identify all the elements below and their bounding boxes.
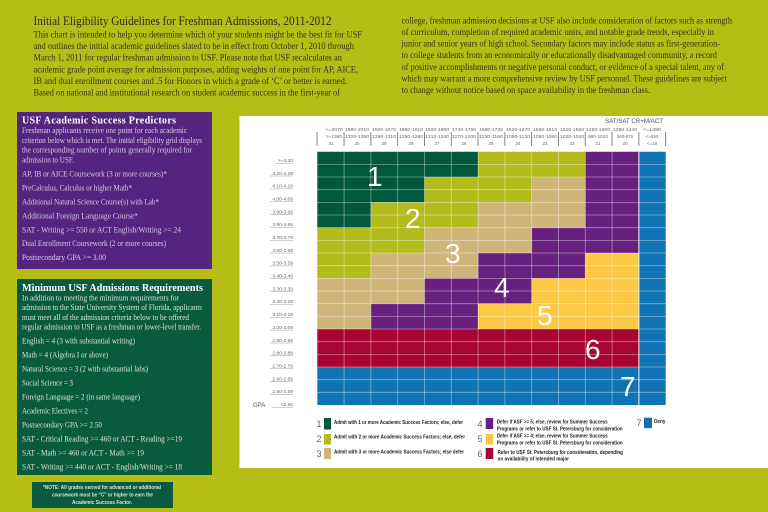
row labels: GPA ranges: 3.80-3.89 [272, 222, 293, 228]
row labels: GPA ranges: 2.50-2.59 [272, 389, 293, 395]
intro text: right column: which may warrant a more comprehensive review by USF personnel. These guidelines are subject [402, 74, 727, 84]
intro text: right column: junior and senior years of high school. Secondary factors may include status as first-generation- [401, 38, 720, 50]
legend item 4: Programs or refer to USF St. Petersburg for consideration [497, 426, 623, 432]
panel: Minimum USF Admissions Requirements [17, 279, 212, 475]
zone 6: red [317, 329, 639, 367]
legend item 7: Deny [654, 419, 666, 425]
row labels: GPA ranges: 3.00-3.09 [272, 325, 293, 331]
intro text: left column: IB and dual enrollment courses and .5 for Honors in which a grade of ‘C’ or better is earned. [34, 76, 347, 87]
panel: USF Academic Success Predictors: Additional Natural Science Course(s) with Lab* [22, 196, 159, 206]
intro text: left column [34, 13, 362, 98]
legend item 1: Admit with 1 or more Academic Success Factors; else, defer [334, 420, 464, 426]
legend [316, 418, 666, 462]
row labels: GPA ranges: 3.40-3.49 [272, 274, 293, 280]
column headers: test score ranges: 1130-1160 [479, 134, 504, 139]
column headers: test score ranges: 23 [542, 141, 548, 146]
column headers: test score ranges: 1860-1910 [399, 127, 424, 132]
intro text: right column: college, freshman admission decisions at USF also include consideration of factors such as strength [402, 16, 732, 26]
legend item 1 [316, 418, 464, 430]
zone 4: purple [371, 152, 639, 329]
panel: USF Academic Success Predictors: admission to USF. [22, 154, 74, 164]
legend item 3 [316, 448, 465, 459]
column headers: test score ranges: <=930 [646, 134, 658, 139]
column headers: test score ranges: 1560-1610 [533, 127, 558, 132]
intro text: left column: March 1, 2011 for regular freshman admission to USF. Please note that USF recalculates an [34, 52, 342, 64]
column headers: test score ranges: >=1360 [326, 134, 343, 139]
legend item 3: 3 [316, 449, 322, 459]
legend item 1: 1 [316, 419, 322, 429]
intro text: right column [401, 16, 732, 96]
legend item 6: Refer to USF St. Petersburg for consideration, depending [498, 450, 623, 456]
panel: Minimum USF Admissions Requirements: must meet all of the admission criteria below to be offered [22, 312, 190, 322]
note box: coursework must be “C” or higher to earn the [52, 492, 153, 498]
column headers: test score ranges: 20 [622, 141, 628, 146]
column headers: test score ranges: 1680-1730 [479, 127, 504, 132]
row labels: GPA ranges: 3.30-3.39 [272, 286, 293, 292]
row labels: GPA ranges: 3.90-3.99 [272, 209, 293, 215]
note box: *NOTE: All grades earned for advanced or additional [43, 485, 162, 491]
panel: Minimum USF Admissions Requirements: In addition to meeting the minimum requirements for [22, 292, 179, 302]
column headers: test score ranges: 1980-2010 [345, 127, 370, 132]
note box: Academic Success Factor. [72, 500, 132, 506]
row labels: GPA ranges: 4.00-4.09 [272, 196, 293, 202]
row labels: GPA ranges: 3.10-3.19 [272, 312, 293, 318]
row labels: GPA ranges: 4.20-4.29 [272, 171, 293, 177]
intro text: right column: to change without notice based on space availability in the freshman class. [402, 85, 650, 96]
legend item 4: 4 [477, 419, 483, 429]
intro text: left column: This chart is intended to help you determine which of your students might be the best fit for USF [34, 30, 362, 40]
panel: Minimum USF Admissions Requirements: Academic Electives = 2 [22, 406, 88, 416]
panel: USF Academic Success Predictors [17, 112, 212, 269]
zone 2: olive [317, 152, 585, 278]
heading: predictors: USF Academic Success Predictors [22, 116, 176, 126]
legend item 4 [477, 418, 623, 432]
legend item 2: 2 [316, 434, 322, 444]
panel: USF Academic Success Predictors: criterion below which is met. The initial eligibility grid displays [22, 135, 203, 145]
legend item 5: 5 [477, 434, 483, 444]
intro text: right column: to college students from an economically or educationally disadvantaged community, a record [402, 50, 717, 61]
heading: requirements: Minimum USF Admissions Requirements [22, 282, 204, 294]
row labels: GPA ranges: 3.20-3.29 [272, 299, 293, 305]
panel: USF Academic Success Predictors: Postsecondary GPA >= 3.00 [22, 252, 106, 262]
column headers: test score ranges: 28 [408, 141, 414, 146]
axis title: SAT/ACT: SAT/SAT CR+M/ACT [605, 118, 663, 125]
column headers: test score ranges: 1620-1670 [506, 127, 531, 132]
intro text: left column: academic grade point average for admission purposes, adding weights of one point for AP, AICE, [34, 64, 358, 76]
panel: Minimum USF Admissions Requirements: Postsecondary GPA >= 2.50 [22, 420, 102, 430]
legend item 6 [477, 448, 623, 462]
zone 7: blue [317, 152, 666, 405]
column headers: test score ranges: 1050-1080 [533, 134, 558, 139]
panel: Minimum USF Admissions Requirements: English = 4 (3 with substantial writing) [22, 336, 135, 346]
column headers: test score ranges [317, 127, 666, 146]
column headers: test score ranges: 25 [488, 141, 494, 146]
legend item 4: Defer if ASF >= 5; else, review for Summer Success [497, 420, 608, 426]
column headers: test score ranges: 1020-1040 [560, 134, 585, 139]
zone 1: dark green [317, 152, 478, 228]
intro text: left column: and outlines the initial academic guidelines slated to be in effect from October 1, 2010 through [34, 41, 354, 52]
row labels: GPA ranges: 2.70-2.79 [272, 363, 293, 369]
row labels: GPA ranges: 3.60-3.69 [272, 248, 293, 254]
column headers: test score ranges: 29 [381, 141, 387, 146]
panel: USF Academic Success Predictors: Additional Foreign Language Course* [22, 210, 138, 220]
legend item 2: Admit with 2 or more Academic Success Factors; else, defer [334, 434, 466, 440]
column headers: test score ranges: 1250-1280 [399, 134, 424, 139]
legend item 5: Defer if ASF >= 4; else, review for Summer Success [497, 434, 608, 440]
column headers: test score ranges: 22 [569, 141, 575, 146]
row labels: GPA ranges: 2.90-2.99 [272, 338, 293, 344]
column headers: test score ranges: 26 [461, 141, 467, 146]
column headers: test score ranges: 1800-1850 [425, 127, 450, 132]
panel: USF Academic Success Predictors: SAT - Writing >= 550 or ACT English/Writing >= 24 [22, 224, 182, 234]
zone number 4: 4 [494, 272, 510, 303]
zone 5: yellow [478, 253, 639, 329]
panel: Minimum USF Admissions Requirements: Foreign Language = 2 (in same language) [22, 392, 140, 402]
legend item 5: Programs or refer to USF St. Petersburg for consideration [497, 440, 623, 446]
zone number 1: 1 [367, 161, 383, 192]
legend item 7 [636, 418, 666, 428]
row labels: GPA ranges: >=4.30 [278, 158, 293, 164]
column headers: test score ranges: 1920-1970 [372, 127, 397, 132]
legend item 2 [316, 434, 466, 444]
panel: Minimum USF Admissions Requirements: SAT - Math >= 460 or ACT - Math >= 19 [22, 448, 144, 458]
row labels: GPA ranges: 2.60-2.69 [272, 376, 293, 382]
intro text: left column: Based on national and institutional research on student academic success in the first-year of [34, 88, 341, 98]
column headers: test score ranges: 1390-1440 [613, 127, 638, 132]
legend item 5 [477, 434, 623, 446]
column headers: test score ranges: 980-1010 [588, 134, 609, 139]
legend item 7: 7 [636, 418, 642, 428]
zone number 6: 6 [585, 334, 601, 365]
panel: Minimum USF Admissions Requirements: SAT - Writing >= 440 or ACT - English/Writing >= 18 [22, 462, 182, 472]
row labels: GPA ranges: 3.70-3.79 [272, 235, 293, 241]
column headers: test score ranges: 1740-1790 [452, 127, 477, 132]
zone number 2: 2 [405, 203, 421, 234]
intro text: right column: of curriculum, completion of required academic units, and notable grade trends, especially in [402, 27, 714, 38]
panel: Minimum USF Admissions Requirements: Math = 4 (Algebra I or above) [22, 350, 108, 360]
panel: Minimum USF Admissions Requirements: SAT - Critical Reading >= 460 or ACT - Reading >=19 [22, 434, 182, 444]
legend item 6: on availability of intended major [498, 456, 570, 462]
row labels: GPA ranges: 4.10-4.19 [272, 184, 293, 190]
panel: USF Academic Success Predictors: the corresponding number of points generally required for [22, 144, 192, 154]
panel: Minimum USF Admissions Requirements: Natural Science = 3 (2 with substantial labs) [22, 364, 148, 374]
column headers: test score ranges: 31 [328, 141, 334, 146]
panel: USF Academic Success Predictors: AP, IB or AICE Coursework (3 or more courses)* [22, 168, 167, 178]
column headers: test score ranges: 21 [595, 141, 601, 146]
column headers: test score ranges: 30 [354, 141, 360, 146]
panel: USF Academic Success Predictors: Freshman applicants receive one point for each academic [22, 125, 187, 135]
panel: USF Academic Success Predictors: PreCalculus, Calculus or higher Math* [22, 182, 132, 192]
column headers: test score ranges: >=2070 [325, 127, 344, 132]
zone number 3: 3 [445, 238, 461, 269]
column headers: test score ranges: 24 [515, 141, 521, 146]
column headers: test score ranges: 1450-1500 [586, 127, 611, 132]
column headers: test score ranges: 1090-1120 [506, 134, 531, 139]
column headers: test score ranges: 1170-1200 [452, 134, 477, 139]
row labels: GPA ranges: <2.50 [281, 402, 293, 408]
intro text: right column: of positive accomplishments or negative personal conduct, or evidence of a special talent, any of [402, 62, 725, 73]
row labels: GPA ranges: 3.50-3.59 [272, 261, 293, 267]
column headers: test score ranges: 1290-1310 [372, 134, 397, 139]
legend item 3: Admit with 3 or more Academic Success Factors; else defer [334, 450, 465, 456]
column headers: test score ranges: <=19 [647, 141, 658, 146]
column headers: test score ranges: 1210-1240 [425, 134, 450, 139]
zone number 7: 7 [620, 371, 636, 402]
panel: Minimum USF Admissions Requirements: admission to the State University System of Florida, applicants [22, 302, 203, 312]
column headers: test score ranges: 1320-1350 [345, 134, 370, 139]
panel: Minimum USF Admissions Requirements: regular admission to USF as a freshman or lower-level transfer. [22, 322, 201, 332]
row labels: GPA ranges: 2.80-2.89 [272, 351, 293, 357]
legend item 6: 6 [477, 449, 483, 459]
panel: eligibility chart background [240, 116, 768, 468]
column headers: test score ranges: 27 [434, 141, 440, 146]
note box [32, 482, 173, 508]
panel: Minimum USF Admissions Requirements: Social Science = 3 [22, 378, 73, 388]
zone 3: tan [317, 177, 585, 329]
title: Initial Eligibility Guidelines for Freshman Admissions, 2011-2012 [34, 13, 332, 28]
column headers: test score ranges: 940-970 [617, 134, 633, 139]
axis label: GPA: GPA [253, 403, 265, 409]
column headers: test score ranges: 1510-1550 [560, 127, 585, 132]
row labels: GPA ranges [270, 158, 293, 408]
zone number 5: 5 [537, 300, 553, 331]
panel: USF Academic Success Predictors: Dual Enrollment Coursework (2 or more courses) [22, 238, 166, 248]
column headers: test score ranges: <=1380 [643, 127, 662, 132]
